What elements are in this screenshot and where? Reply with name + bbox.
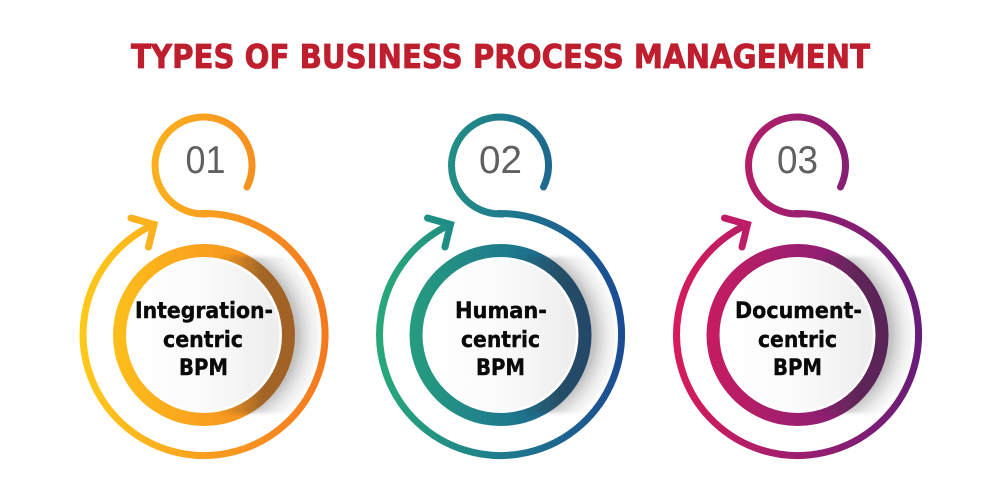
label 02: Human- [455, 299, 547, 324]
number 01: 01 [186, 139, 226, 182]
arrow head 02 [428, 218, 450, 247]
label 02: centric [461, 328, 540, 353]
panel: 02 Human-centric BPM [380, 117, 622, 456]
cast shadow 01 [248, 255, 318, 415]
label 02: BPM [476, 356, 525, 381]
arrow head 03 [724, 218, 748, 247]
spiral line 02 [380, 117, 622, 456]
spiral line 03 [677, 117, 919, 456]
title: TYPES OF BUSINESS PROCESS MANAGEMENT [131, 37, 870, 76]
number 03: 03 [777, 139, 818, 182]
label 01: Integration- [135, 299, 273, 324]
ring shading 02 [521, 256, 592, 414]
white disc 02 [422, 257, 578, 413]
inner ring 01 [113, 244, 295, 426]
inner ring 03 [706, 244, 888, 426]
label 03: BPM [773, 356, 822, 381]
panel: 03 Document-centric BPM [677, 117, 919, 456]
cast shadow 03 [842, 255, 911, 415]
label 01: BPM [179, 356, 228, 381]
label 03: centric [758, 328, 837, 353]
inner ring 02 [410, 244, 592, 426]
number 02: 02 [479, 139, 522, 182]
cast shadow 02 [544, 255, 614, 415]
label 03: Document- [735, 299, 862, 324]
label 01: centric [163, 328, 243, 353]
white disc 01 [126, 257, 282, 413]
panel: 01 Integration-centric BPM [83, 117, 325, 456]
white disc 03 [720, 257, 876, 413]
spiral line 01 [83, 117, 325, 456]
ring shading 01 [222, 254, 295, 416]
arrow head 01 [131, 218, 154, 247]
ring shading 03 [818, 256, 888, 414]
